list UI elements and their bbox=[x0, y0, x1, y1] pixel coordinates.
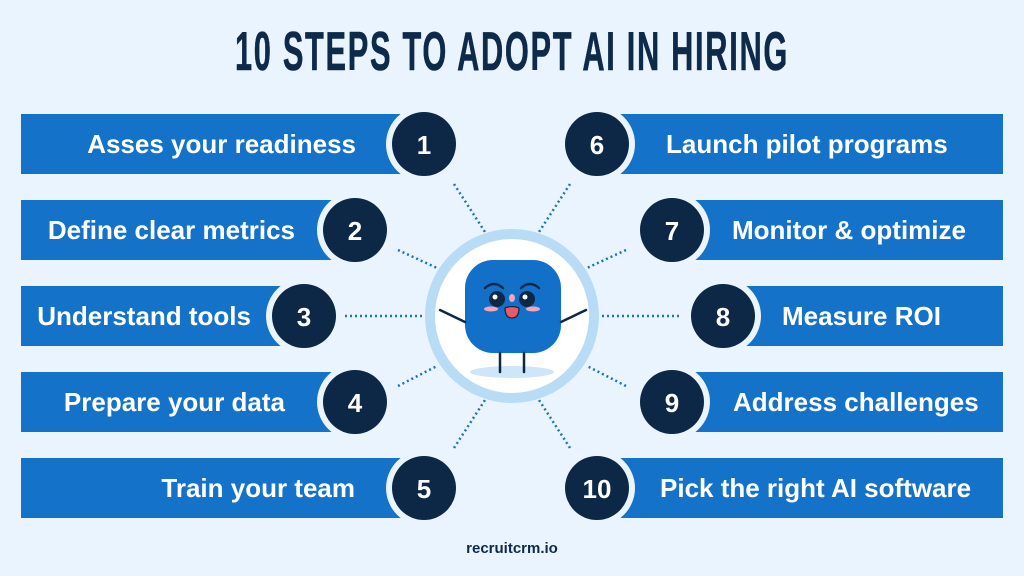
step 5: Train your team bbox=[161, 473, 355, 503]
dotted connectors bbox=[345, 184, 679, 448]
step 4 bbox=[21, 364, 393, 440]
step 3 bbox=[21, 278, 342, 354]
step 7: Monitor & optimize bbox=[732, 215, 966, 245]
step 9: 9 bbox=[665, 388, 679, 418]
step 10: 10 bbox=[583, 474, 611, 504]
step 8 bbox=[685, 278, 1003, 354]
step 4: Prepare your data bbox=[64, 387, 286, 417]
step 2 bbox=[21, 192, 393, 268]
step 10 bbox=[559, 450, 1003, 526]
step 8: 8 bbox=[716, 302, 730, 332]
step 5 bbox=[21, 450, 462, 526]
title: 10 STEPS TO ADOPT AI IN HIRING bbox=[235, 22, 789, 82]
step 8: Measure ROI bbox=[782, 301, 941, 331]
step 1: 1 bbox=[417, 130, 431, 160]
footer: recruitcrm.io bbox=[466, 540, 558, 557]
step 6: 6 bbox=[590, 130, 604, 160]
step 10: Pick the right AI software bbox=[660, 473, 971, 503]
step 5: 5 bbox=[417, 474, 431, 504]
center mascot bbox=[425, 229, 599, 403]
step 3: 3 bbox=[297, 302, 311, 332]
step 1 bbox=[21, 106, 462, 182]
step 7: 7 bbox=[665, 216, 679, 246]
step 6 bbox=[559, 106, 1003, 182]
step 7 bbox=[634, 192, 1003, 268]
step 2: 2 bbox=[348, 216, 362, 246]
step 9 bbox=[634, 364, 1003, 440]
step 3: Understand tools bbox=[37, 301, 251, 331]
step 6: Launch pilot programs bbox=[666, 129, 948, 159]
step 4: 4 bbox=[348, 388, 363, 418]
step 1: Asses your readiness bbox=[87, 129, 356, 159]
step 2: Define clear metrics bbox=[48, 215, 295, 245]
step 9: Address challenges bbox=[733, 387, 979, 417]
